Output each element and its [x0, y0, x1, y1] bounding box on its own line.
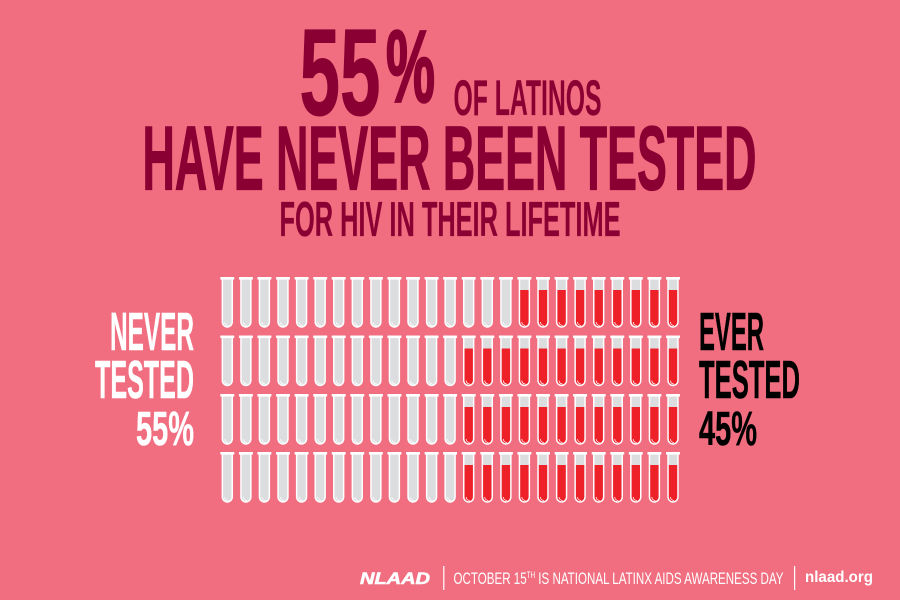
awareness day text: OCTOBER 15	[454, 570, 558, 588]
text: TESTED	[95, 350, 194, 410]
headline percent sign: %	[386, 10, 435, 124]
label: ever tested 45%: 45%	[699, 403, 757, 456]
label: ever tested 45%: EVER	[699, 302, 764, 362]
headline number 55: 55	[300, 5, 380, 142]
awareness day text: IS NATIONAL LATINX AIDS AWARENESS DAY	[535, 570, 784, 588]
title	[142, 5, 756, 247]
label: never tested 55%: 55%	[136, 403, 194, 456]
tube row 2	[220, 336, 680, 386]
NLAAD logo: NLAAD	[360, 569, 430, 588]
text: NEVER	[110, 302, 194, 362]
tube row 4	[220, 452, 680, 503]
awareness day text: TH	[527, 570, 535, 580]
website: nlaad.org	[805, 569, 873, 586]
tube row 1	[220, 277, 680, 328]
footer	[360, 566, 873, 590]
label: ever tested 45%	[699, 302, 800, 456]
label: never tested 55%	[95, 302, 194, 456]
test tube chart: 55 empty, 45 filled	[220, 277, 680, 503]
tube row 3	[220, 394, 680, 445]
title: OF LATINOS	[454, 70, 602, 126]
